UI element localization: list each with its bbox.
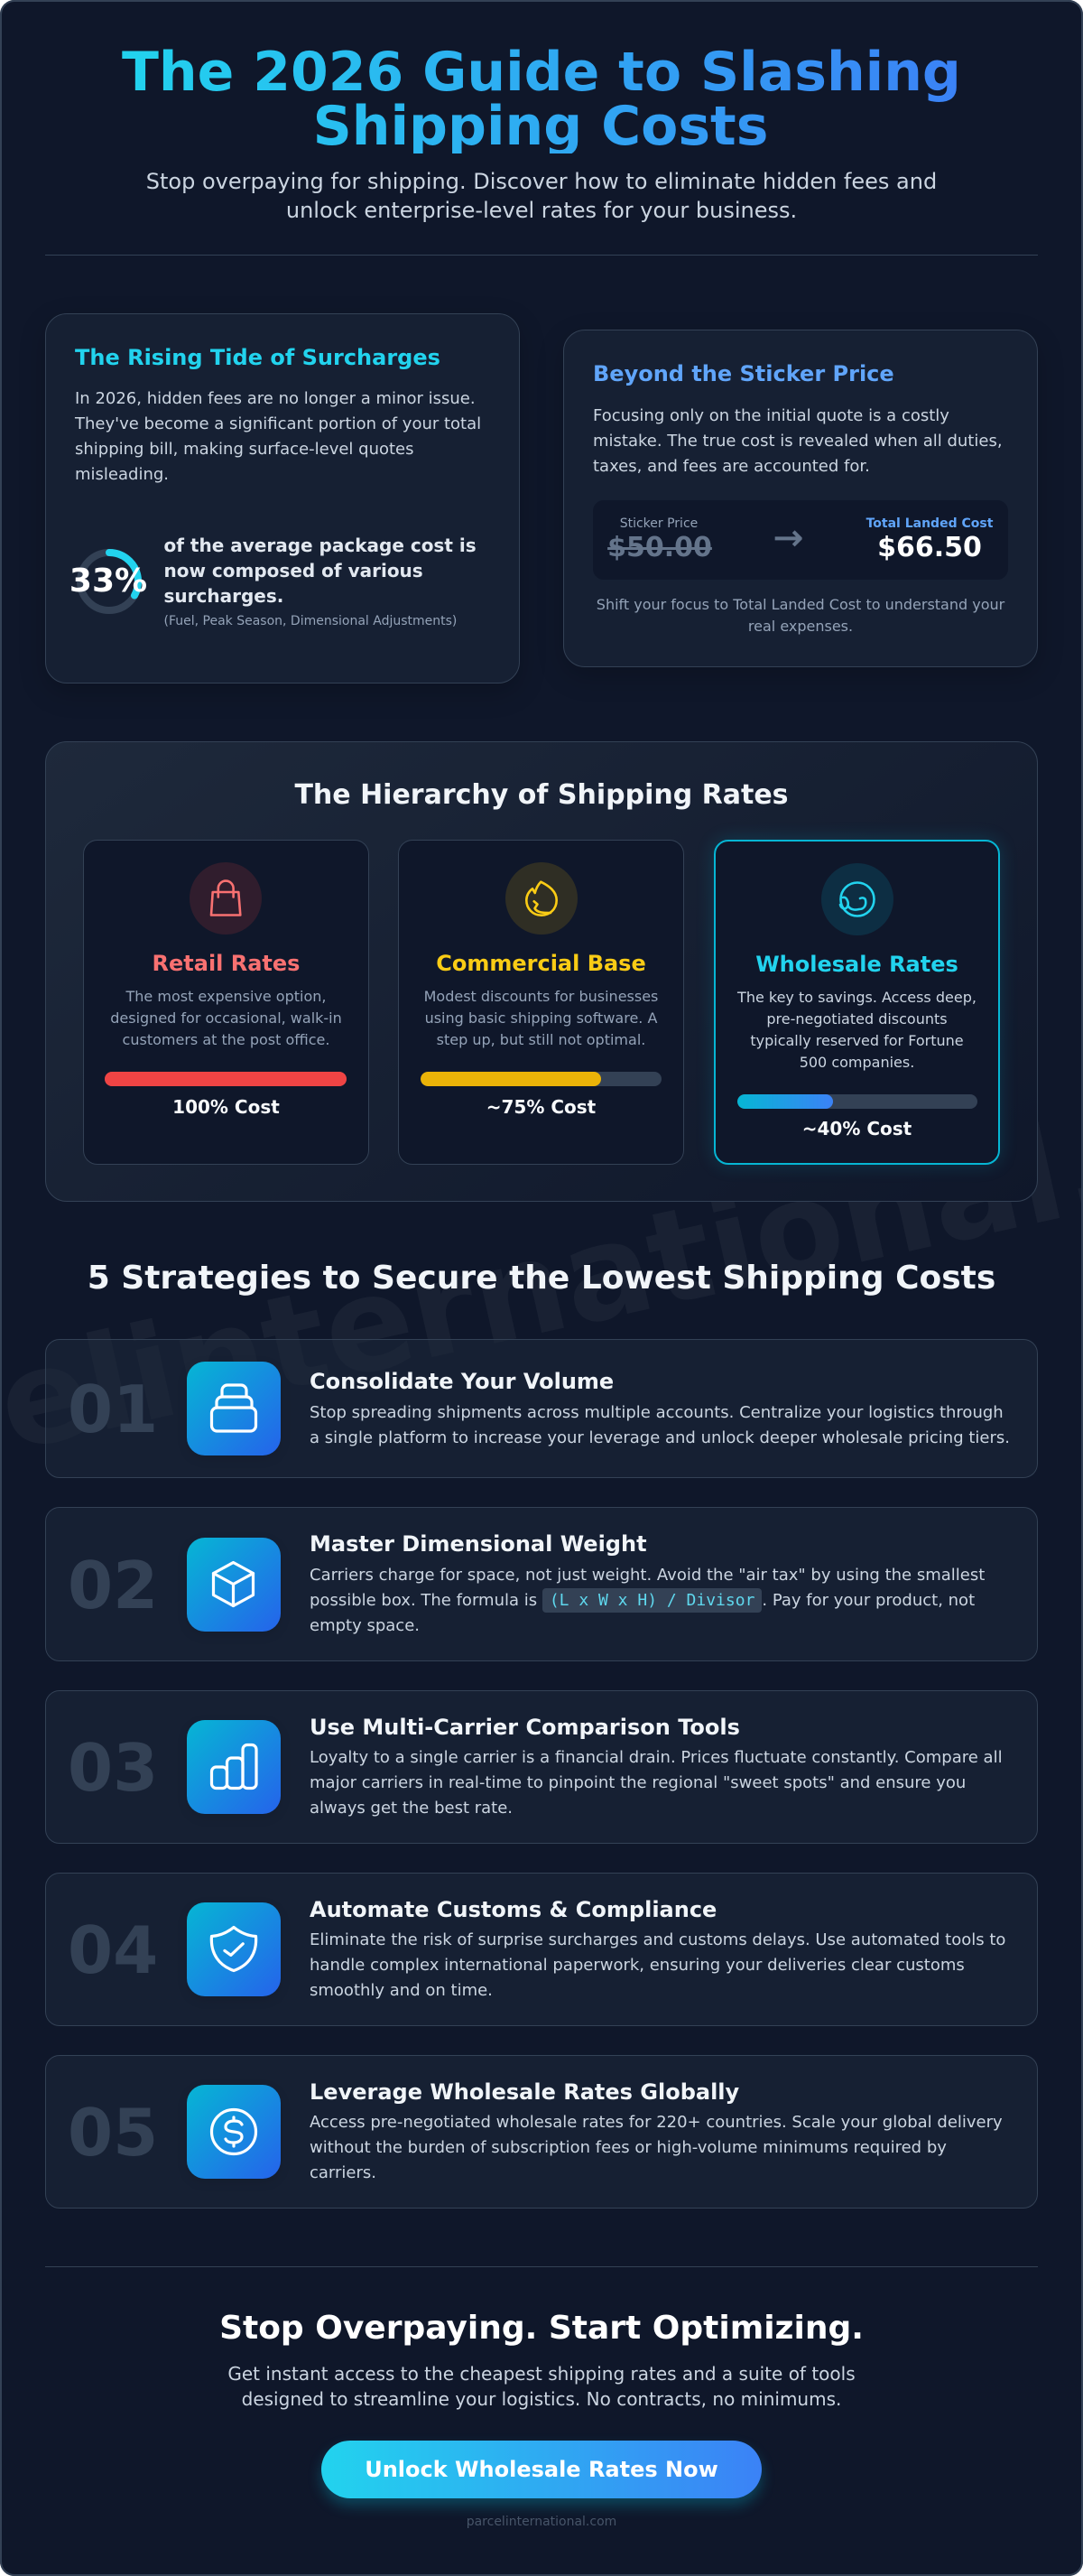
text: sticker price body: Focusing only on the initial quote is a costly — [593, 406, 949, 425]
cta text — [227, 2363, 856, 2410]
strategy 4 — [45, 1873, 1038, 2026]
strategy 5 — [45, 2055, 1038, 2209]
footer url: parcelinternational.com — [467, 2515, 616, 2529]
panel: sticker price — [563, 330, 1038, 667]
tier: retail — [83, 840, 369, 1165]
strategy text: a single platform to increase your leverage and unlock deeper wholesale pricing tiers. — [310, 1428, 1010, 1447]
text: rising tide body: shipping bill, making surface-level quotes — [75, 440, 414, 459]
strategy text: Access pre-negotiated wholesale rates for 220+ countries. Scale your global delivery — [310, 2113, 1003, 2132]
tier description — [736, 989, 977, 1071]
tier title: Retail Rates — [153, 951, 300, 976]
strategy text: Eliminate the risk of surprise surcharges and customs delays. Use automated tools to — [310, 1930, 1005, 1949]
strategy text: Carriers charge for space, not just weight. Avoid the "air tax" by using the smallest — [310, 1566, 985, 1585]
heading: hierarchy: The Hierarchy of Shipping Rates — [294, 779, 789, 811]
stat description: now composed of various — [164, 560, 423, 581]
subtitle — [146, 169, 937, 223]
strategy text: possible box. The formula is (L x W x H) / Divisor . Pay for your product, not — [310, 1591, 975, 1610]
value: sticker price: $50.00 — [607, 532, 712, 563]
icon: shopping bag — [190, 862, 262, 935]
stat description: surcharges. — [164, 585, 283, 607]
text: sticker price body: taxes, and fees are accounted for. — [593, 457, 870, 476]
subtitle: unlock enterprise-level rates for your business. — [286, 198, 797, 223]
strategy text — [310, 1930, 1005, 2000]
cost label: ~40% Cost — [802, 1118, 912, 1139]
cta button — [321, 2441, 762, 2498]
strategy text: major carriers in real-time to pinpoint the regional "sweet spots" and ensure you — [310, 1773, 966, 1792]
strategy text: without the burden of subscription fees or high-volume minimums required by — [310, 2138, 947, 2157]
icon: dollar coin — [187, 2085, 281, 2179]
strategy title: Leverage Wholesale Rates Globally — [310, 2078, 739, 2104]
text: sticker price body — [593, 406, 1003, 476]
strategy 2 — [45, 1507, 1038, 1661]
caption — [597, 596, 1005, 635]
text: rising tide body: In 2026, hidden fees are no longer a minor issue. — [75, 389, 476, 408]
tier title: Wholesale Rates — [755, 952, 958, 977]
tier description — [424, 988, 658, 1048]
heading: rising tide: The Rising Tide of Surcharges — [75, 345, 440, 370]
cost bar — [737, 1094, 977, 1109]
strategy text — [310, 2113, 1003, 2182]
icon: bar chart — [187, 1720, 281, 1814]
strategy title: Use Multi-Carrier Comparison Tools — [310, 1714, 740, 1739]
title — [122, 45, 959, 153]
tier description: designed for occasional, walk-in — [110, 1009, 342, 1027]
tier description: Modest discounts for businesses — [424, 988, 658, 1005]
stat description — [164, 535, 477, 607]
icon: shield check — [187, 1902, 281, 1996]
icon: flame — [505, 862, 578, 935]
cta heading: Stop Overpaying. Start Optimizing. — [219, 2310, 864, 2347]
tier description: The key to savings. Access deep, — [737, 989, 977, 1006]
arrow: → — [773, 517, 803, 559]
tier title: Commercial Base — [436, 951, 646, 976]
title: The 2026 Guide to Slashing — [122, 41, 961, 104]
strategy text: smoothly and on time. — [310, 1981, 493, 2000]
call to action — [45, 2266, 1038, 2529]
strategy text — [310, 1403, 1010, 1447]
strategy text: Stop spreading shipments across multiple accounts. Centralize your logistics through — [310, 1403, 1004, 1422]
cost label: 100% Cost — [172, 1096, 280, 1118]
strategy text: handle complex international paperwork, ensuring your deliveries clear customs — [310, 1956, 965, 1975]
text: sticker price body: mistake. The true cost is revealed when all duties, — [593, 432, 1003, 451]
title: Shipping Costs — [313, 95, 768, 158]
strategy text — [310, 1748, 1003, 1818]
text: rising tide body: They've become a significant portion of your total — [75, 414, 481, 433]
number: 01 — [68, 1372, 158, 1447]
strategy text: Loyalty to a single carrier is a financial drain. Prices fluctuate constantly. Compare all — [310, 1748, 1003, 1767]
icon: stacked boxes — [187, 1362, 281, 1455]
tier: wholesale — [714, 840, 1000, 1165]
heading: 5 strategies: 5 Strategies to Secure the Lowest Shipping Costs — [88, 1260, 995, 1297]
caption: Shift your focus to Total Landed Cost to understand your — [597, 596, 1004, 613]
text: rising tide body — [74, 389, 481, 484]
strategy text: carriers. — [310, 2163, 376, 2182]
caption: real expenses. — [748, 618, 853, 635]
tier description: customers at the post office. — [123, 1031, 329, 1048]
text: rising tide body: misleading. — [75, 465, 169, 484]
number: 02 — [68, 1548, 158, 1623]
cost bar — [421, 1072, 662, 1086]
number: 04 — [68, 1912, 158, 1988]
stat description: of the average package cost is — [164, 535, 477, 556]
strategy text: empty space. — [310, 1616, 420, 1635]
tier: commercial — [398, 840, 684, 1165]
cost bar — [105, 1072, 347, 1086]
stat footnote: (Fuel, Peak Season, Dimensional Adjustments) — [164, 614, 457, 628]
strategy title: Consolidate Your Volume — [310, 1369, 614, 1394]
strategy title: Master Dimensional Weight — [310, 1531, 647, 1557]
value: total landed cost: $66.50 — [877, 532, 982, 563]
tier description: typically reserved for Fortune — [750, 1032, 964, 1049]
strategy text: always get the best rate. — [310, 1799, 513, 1818]
stat: 33%: 33% — [69, 563, 147, 600]
label: total landed cost: Total Landed Cost — [866, 516, 993, 531]
label: sticker price: Sticker Price — [620, 516, 698, 531]
strategy 3 — [45, 1690, 1038, 1844]
strategy title: Automate Customs & Compliance — [310, 1896, 717, 1921]
cost label: ~75% Cost — [486, 1096, 596, 1118]
tier description: The most expensive option, — [126, 988, 326, 1005]
panel: rising surcharges — [45, 313, 520, 684]
tier description: using basic shipping software. A — [425, 1009, 657, 1027]
icon: wholesale badge — [821, 863, 893, 935]
price comparison — [593, 500, 1008, 580]
heading: beyond sticker price: Beyond the Sticker Price — [593, 361, 894, 386]
strategy text — [310, 1566, 985, 1635]
cta text: designed to streamline your logistics. No contracts, no minimums. — [242, 2388, 841, 2410]
tier description: 500 companies. — [800, 1054, 914, 1071]
tier description — [110, 988, 342, 1048]
header — [45, 41, 1038, 256]
cta button: Unlock Wholesale Rates Now — [365, 2457, 718, 2482]
tier description: step up, but still not optimal. — [437, 1031, 645, 1048]
donut chart: 33 percent — [77, 549, 142, 614]
panel: hierarchy of shipping rates — [45, 741, 1038, 1202]
number: 05 — [68, 2095, 158, 2171]
subtitle: Stop overpaying for shipping. Discover how to eliminate hidden fees and — [146, 169, 937, 194]
number: 03 — [68, 1730, 158, 1806]
cta text: Get instant access to the cheapest shipping rates and a suite of tools — [227, 2363, 856, 2385]
strategy 1 — [45, 1339, 1038, 1478]
tier description: pre-negotiated discounts — [766, 1010, 948, 1028]
icon: cube — [187, 1538, 281, 1632]
